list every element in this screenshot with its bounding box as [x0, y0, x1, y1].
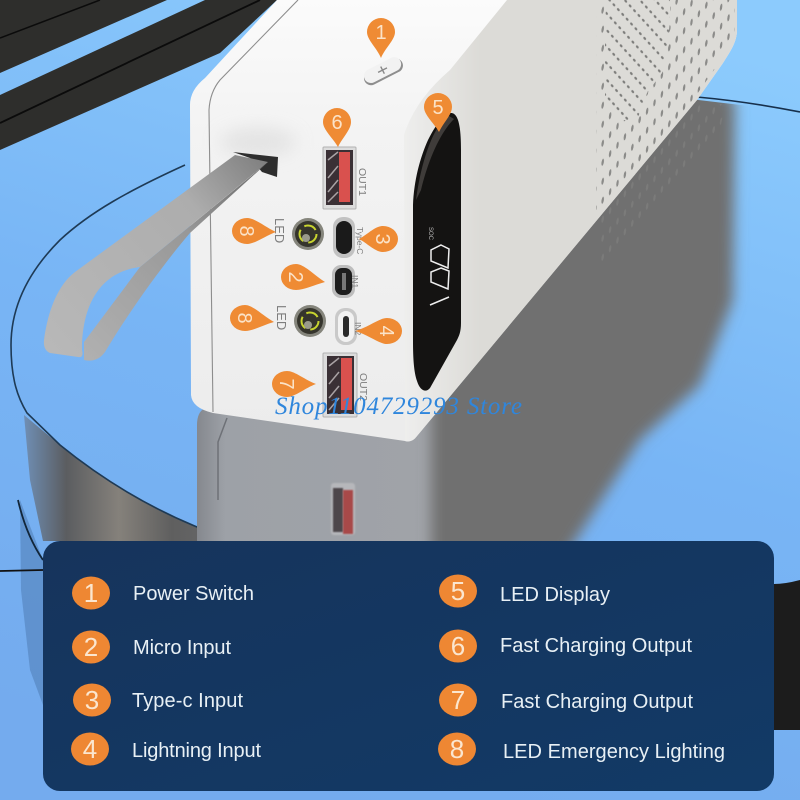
legend item 3: 3 — [85, 685, 99, 715]
pin 8 upper — [232, 218, 276, 244]
legend item 6 — [439, 630, 692, 662]
strap loop — [44, 155, 268, 361]
LED display — [413, 113, 461, 391]
Micro port — [332, 265, 355, 298]
port labels: IN2 — [353, 322, 363, 336]
legend item 5: 5 — [451, 576, 465, 606]
device body — [190, 0, 737, 441]
legend item 6: Fast Charging Output — [500, 635, 692, 657]
disc edge and metallic side — [0, 97, 800, 730]
pin 5: 5 — [432, 97, 444, 119]
legend item 2: Micro Input — [133, 637, 231, 659]
port labels: LED — [272, 218, 287, 243]
perforated grille — [596, 0, 735, 210]
pin 3: 3 — [371, 233, 393, 245]
side face — [404, 0, 737, 441]
Type-C port — [333, 217, 355, 258]
legend item 2: 2 — [84, 632, 98, 662]
pin 6 — [323, 108, 351, 147]
legend item 3: Type-c Input — [132, 690, 243, 712]
pin 7 — [272, 371, 316, 397]
legend item 7: Fast Charging Output — [501, 691, 693, 713]
LED lamp lower — [294, 305, 326, 337]
port labels: LED — [274, 305, 289, 330]
seam line — [209, 0, 298, 412]
legend item 8 — [438, 732, 725, 766]
pin 2: 2 — [284, 271, 306, 283]
legend item 7 — [439, 684, 693, 716]
legend item 8: 8 — [450, 734, 464, 764]
legend item 6: 6 — [451, 631, 465, 661]
legend item 5: LED Display — [500, 584, 610, 606]
digits 100 — [430, 245, 449, 305]
port labels: OUT1 — [356, 168, 368, 196]
power button — [361, 54, 405, 88]
watermark: Shop1104729293 Store — [275, 393, 522, 420]
pin 8 lower — [230, 305, 274, 331]
legend item 2 — [72, 630, 231, 664]
legend item 3 — [73, 684, 243, 716]
port labels: IN1 — [350, 275, 360, 288]
Lightning port — [335, 308, 357, 345]
device reflection — [197, 370, 480, 545]
pin 4 — [355, 318, 402, 344]
legend item 1 — [72, 576, 254, 610]
display sheen — [416, 116, 454, 200]
slot shadow — [220, 128, 296, 156]
legend item 5 — [439, 574, 610, 608]
strap slot — [233, 152, 278, 177]
legend item 4: 4 — [83, 734, 97, 764]
pin 2 — [281, 264, 325, 290]
pin 6: 6 — [331, 112, 343, 134]
pin 4: 4 — [375, 325, 397, 337]
panel: legend — [43, 541, 774, 791]
pin 8 upper: 8 — [235, 225, 257, 237]
pin 1: 1 — [375, 22, 387, 44]
legend item 1: 1 — [84, 578, 98, 608]
USB port OUT1 — [323, 147, 356, 209]
back strand — [84, 163, 267, 361]
legend item 4: Lightning Input — [132, 740, 261, 762]
device shadow on disc — [432, 60, 735, 565]
black cables top left — [0, 0, 277, 150]
port labels: OUT2 — [357, 373, 369, 401]
legend item 4 — [71, 732, 261, 766]
front strand — [44, 155, 268, 357]
reflected perforation dots — [596, 104, 725, 270]
pin 5 — [424, 93, 452, 132]
USB port OUT2 — [323, 353, 357, 417]
port labels: Type-C — [355, 227, 365, 254]
SOC label: SOC — [427, 227, 433, 241]
pin 8 lower: 8 — [233, 312, 255, 324]
LED lamp upper — [292, 218, 324, 250]
legend item 7: 7 — [451, 685, 465, 715]
pin 3 — [359, 226, 398, 252]
pin 1 — [367, 18, 395, 58]
legend item 8: LED Emergency Lighting — [503, 741, 725, 763]
legend item 1: Power Switch — [133, 583, 254, 605]
port labels — [272, 168, 369, 401]
dense grille — [605, 0, 670, 120]
pin 7: 7 — [275, 378, 297, 390]
